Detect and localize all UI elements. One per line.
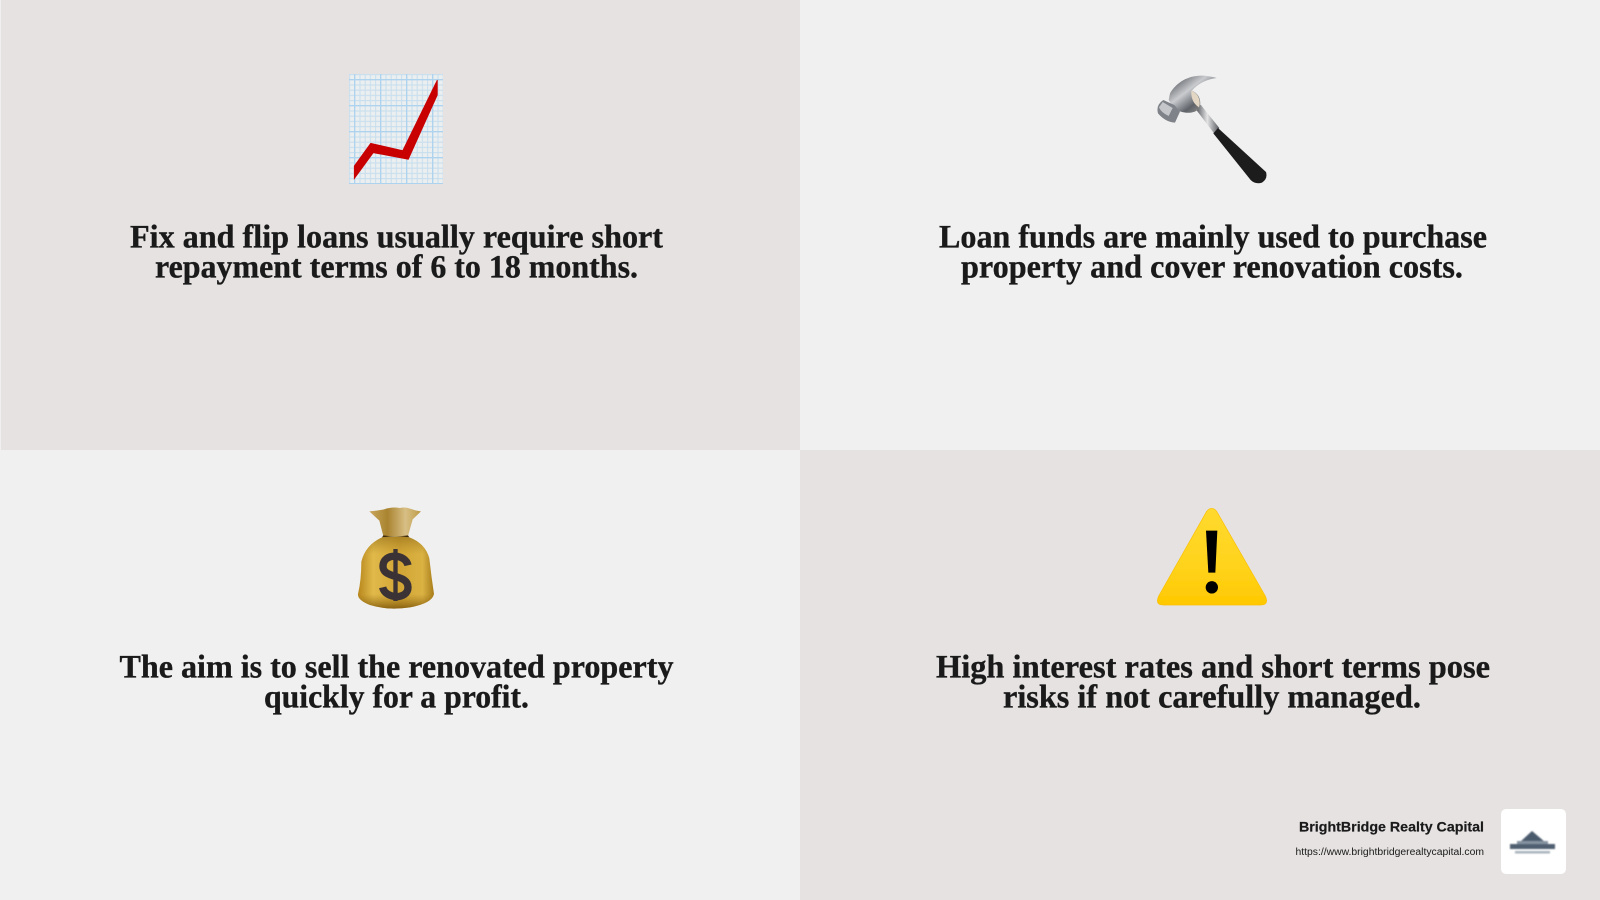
heading: repayment terms <box>130 220 663 286</box>
brand url: https://www.brightbridgerealtycapital.com <box>1296 847 1484 858</box>
heading: use of funds: property and cover renovation costs. <box>961 250 1463 286</box>
heading: use of funds: Loan funds are mainly used to purchase <box>939 220 1487 256</box>
panel: repayment terms <box>0 0 800 450</box>
panel: profit goal <box>0 450 800 900</box>
icon: hammer <box>1157 76 1266 183</box>
heading: profit goal <box>120 650 674 716</box>
heading: profit goal: The aim is to sell the renovated property <box>120 650 674 686</box>
brand footer <box>1296 809 1566 874</box>
logo tile <box>1501 809 1566 874</box>
panel: risks <box>800 450 1600 900</box>
brand name: BrightBridge Realty Capital <box>1299 818 1484 834</box>
icon: money bag <box>358 507 434 609</box>
heading: risks <box>936 650 1490 716</box>
heading: use of funds <box>939 220 1487 286</box>
heading: risks: High interest rates and short terms pose <box>936 650 1490 686</box>
heading: risks: risks if not carefully managed. <box>1003 680 1421 716</box>
panel: use of funds <box>800 0 1600 450</box>
icon: warning sign <box>1157 508 1267 605</box>
heading: repayment terms: repayment terms of 6 to 18 months. <box>155 250 638 286</box>
heading: repayment terms: Fix and flip loans usually require short <box>130 220 663 256</box>
icon: rising chart <box>349 74 443 184</box>
heading: profit goal: quickly for a profit. <box>264 680 529 716</box>
